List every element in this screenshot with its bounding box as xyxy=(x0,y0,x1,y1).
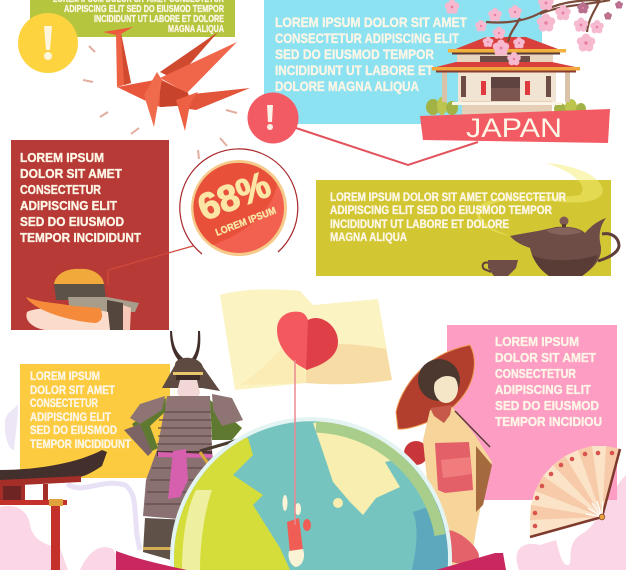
panel: olive text box with teapot xyxy=(316,163,619,276)
shoulder plates xyxy=(130,396,165,424)
kimono xyxy=(423,407,492,570)
parasol handle xyxy=(455,411,490,447)
flag with red sun xyxy=(220,289,392,390)
connector line: percent badge to sushi xyxy=(108,246,193,285)
yellow panel text: LOREM IPSUM xyxy=(30,371,100,383)
pink panel text xyxy=(495,334,602,429)
hair xyxy=(418,359,460,401)
panel: blue text box xyxy=(264,0,542,124)
percent badge 68%: LOREM IPSUM xyxy=(214,206,278,239)
pink panel text: TEMPOR INCIDIOU xyxy=(495,414,602,429)
banner: Japan: JAPAN xyxy=(466,113,562,143)
pink panel text: LOREM IPSUM xyxy=(495,334,579,349)
blue panel text xyxy=(275,14,467,94)
teapot xyxy=(510,216,619,276)
sushi illustration xyxy=(26,269,139,330)
olive panel text xyxy=(330,192,567,244)
steam xyxy=(477,163,603,236)
koi fish xyxy=(282,495,311,567)
icon: red exclamation circle xyxy=(248,92,298,144)
left continent xyxy=(174,430,290,570)
right continent xyxy=(313,418,403,515)
obi sash xyxy=(435,442,473,493)
pagoda building xyxy=(426,37,586,116)
olive panel text: INCIDIDUNT UT LABORE ET DOLORE xyxy=(330,219,509,231)
panel: green top text box xyxy=(30,0,235,37)
bushes xyxy=(426,97,586,115)
dark red panel text: ADIPISCING ELIT xyxy=(20,198,117,213)
decorative rays around crane xyxy=(83,46,237,159)
armour skirt xyxy=(143,450,216,520)
green panel text: INCIDIDUNT UT LABORE ET DOLORE xyxy=(94,14,224,25)
blue panel text: CONSECTETUR ADIPISCING ELIT xyxy=(275,30,459,46)
armour torso xyxy=(157,396,212,450)
blue panel text: INCIDIDUNT UT LABORE ET xyxy=(275,62,433,78)
belt and sash xyxy=(157,451,212,456)
folding fan xyxy=(530,446,620,537)
globe xyxy=(170,417,452,570)
face and beard xyxy=(177,380,200,406)
samurai warrior xyxy=(124,331,245,562)
origami crane xyxy=(103,27,250,131)
yellow panel text: ADIPISCING ELIT xyxy=(30,412,111,424)
yellow panel text: CONSECTETUR xyxy=(30,398,99,410)
pink panel text: SED DO EIUSMOD xyxy=(495,398,599,413)
dark red panel text xyxy=(20,150,141,245)
balloon string xyxy=(294,360,296,525)
green panel text xyxy=(53,0,225,35)
icon: yellow exclamation circle xyxy=(18,13,78,73)
percent badge 68% xyxy=(180,149,298,256)
pink panel text: CONSECTETUR xyxy=(495,366,576,381)
olive panel text: ADIPISCING ELIT SED DO EIUSMOD TEMPOR xyxy=(330,205,553,217)
red sun heart xyxy=(277,312,338,370)
torii gate xyxy=(0,450,107,570)
panel: yellow text box xyxy=(20,364,170,478)
background decoration: pink clouds and lavender dragon xyxy=(0,403,626,570)
connector line: alert to Japan banner xyxy=(296,128,478,165)
tea cup xyxy=(483,260,518,276)
yellow panel text: SED DO EIUSMOD xyxy=(30,425,117,437)
panel: dark red text box with sushi xyxy=(11,140,169,330)
blue panel text: LOREM IPSUM DOLOR SIT AMET xyxy=(275,14,467,30)
dark red panel text: LOREM IPSUM xyxy=(20,150,104,165)
olive panel text: LOREM IPSUM DOLOR SIT AMET CONSECTETUR xyxy=(330,192,567,204)
parasol xyxy=(396,345,474,429)
ocean shading xyxy=(412,500,448,570)
helmet xyxy=(162,358,220,391)
geisha with parasol xyxy=(396,345,492,570)
pink panel text: ADIPISCING ELIT xyxy=(495,382,591,397)
panel: pink text box xyxy=(447,325,617,500)
dark red panel text: SED DO EIUSMOD xyxy=(20,214,124,229)
yellow panel text xyxy=(30,371,131,451)
hand fan xyxy=(445,530,479,564)
blue panel text: SED DO EIUSMOD TEMPOR xyxy=(275,46,434,62)
face xyxy=(434,373,458,403)
pink panel text: DOLOR SIT AMET xyxy=(495,350,596,365)
dark red panel text: TEMPOR INCIDIDUNT xyxy=(20,230,141,245)
yellow panel text: DOLOR SIT AMET xyxy=(30,385,115,397)
yellow panel text: TEMPOR INCIDIDUNT xyxy=(30,439,131,451)
katana xyxy=(200,438,245,451)
green panel text: ADIPISCING ELIT SED DO EIUSMOD TEMPOR xyxy=(64,4,225,15)
dark red panel text: DOLOR SIT AMET xyxy=(20,166,122,181)
horns xyxy=(170,331,200,362)
arms xyxy=(132,398,166,452)
green panel text: MAGNA ALIQUA xyxy=(168,24,224,35)
banner: Japan xyxy=(420,109,610,143)
blue panel text: DOLORE MAGNA ALIQUA xyxy=(275,78,419,94)
dark red panel text: CONSECTETUR xyxy=(20,182,101,197)
bottom magenta ribbon xyxy=(116,551,506,570)
cherry blossom branch xyxy=(445,0,623,65)
percent badge 68%: 68% xyxy=(192,164,276,228)
olive panel text: MAGNA ALIQUA xyxy=(330,232,407,244)
